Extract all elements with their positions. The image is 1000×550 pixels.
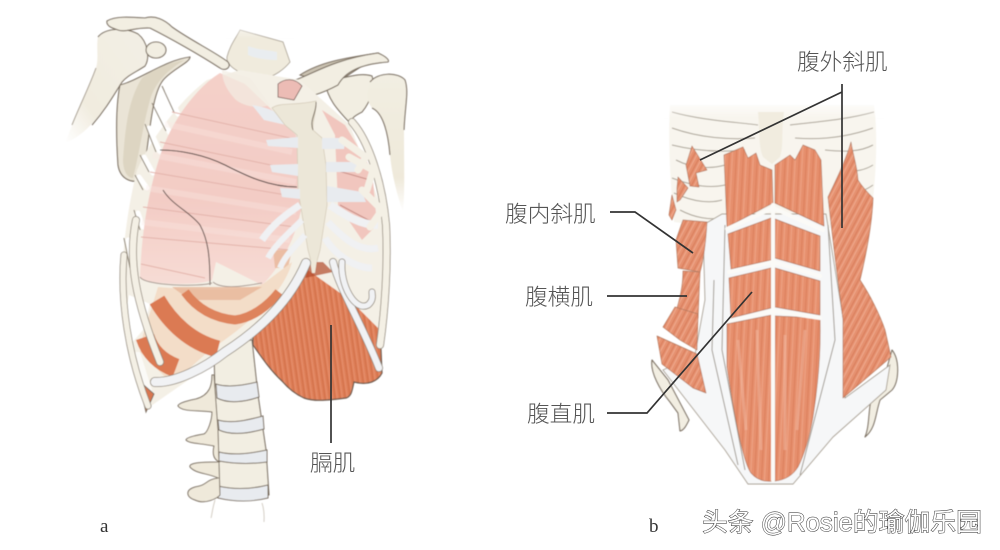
upper costal cartilage bands <box>222 70 286 125</box>
costal cartilages and right ribs <box>262 122 387 345</box>
right external oblique <box>828 142 891 398</box>
label: external oblique: 腹外斜肌 <box>797 49 888 75</box>
rectus abdominis middle right <box>775 219 820 271</box>
left diaphragm with cream rib bands <box>138 262 292 412</box>
left lung <box>140 73 302 287</box>
watermark: 头条 @Rosie的瑜伽乐园 <box>702 508 982 537</box>
rectus leader line <box>607 292 752 413</box>
clavicle left <box>107 17 229 69</box>
hip bones <box>652 350 898 437</box>
left rib arcs <box>123 220 160 406</box>
rectus abdominis upper right <box>775 145 824 226</box>
rib cage backing <box>122 70 388 408</box>
external oblique leader lines <box>700 84 842 228</box>
transversus leader line <box>607 295 687 297</box>
rectus abdominis third right <box>775 268 820 315</box>
figure a: thorax and diaphragm <box>65 17 407 525</box>
right lung <box>322 110 377 240</box>
thoracic spine top <box>225 18 295 103</box>
rectus abdominis third left <box>729 268 771 318</box>
costal margin <box>155 262 379 382</box>
xiphoid and central diaphragm <box>305 260 333 278</box>
label: diaphragm: 膈肌 <box>310 450 355 476</box>
label: rectus abdominis: 腹直肌 <box>527 401 595 427</box>
left humerus <box>65 29 166 143</box>
lumbar spine <box>178 340 272 525</box>
rectus abdominis lower right <box>775 316 820 481</box>
tendinous intersections <box>727 205 823 480</box>
external oblique left flap <box>657 336 706 393</box>
label: transversus abdominis: 腹横肌 <box>525 284 593 310</box>
left scapula <box>117 57 190 181</box>
rib cage <box>663 98 885 228</box>
sternum <box>272 101 327 272</box>
internal oblique lower <box>663 307 698 350</box>
aponeurosis and pelvic outline <box>663 214 890 484</box>
panel letter b: b <box>649 516 658 537</box>
rectus abdominis middle left <box>728 218 771 269</box>
panel letter a: a <box>100 516 109 537</box>
internal oblique leader line <box>610 212 693 253</box>
label: internal oblique: 腹内斜肌 <box>505 201 596 227</box>
lung apex <box>278 80 302 100</box>
diaphragm leader line <box>330 325 332 443</box>
right humerus and scapula <box>285 53 407 212</box>
left serrated slips <box>669 146 707 220</box>
internal oblique upper <box>676 220 707 272</box>
diaphragm right dome <box>253 262 382 400</box>
rectus abdominis upper left <box>724 147 773 227</box>
rectus abdominis lower left <box>727 315 773 481</box>
figure b: abdominal muscles <box>652 98 898 484</box>
transversus abdominis <box>675 271 700 318</box>
